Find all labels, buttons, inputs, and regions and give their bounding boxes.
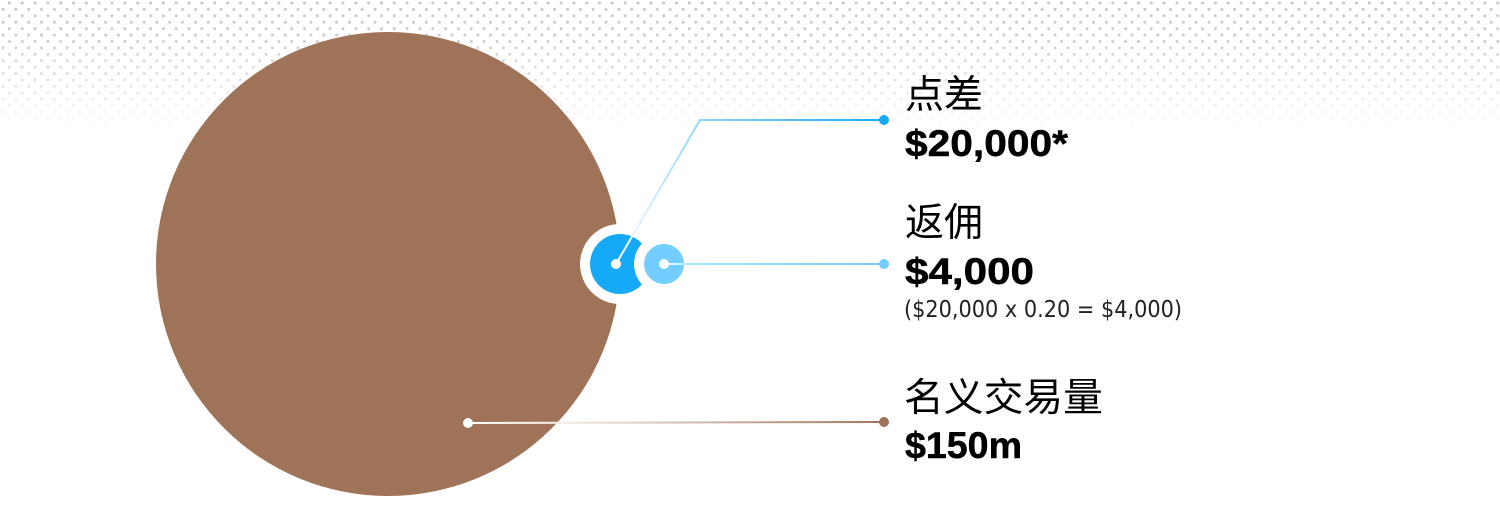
label: rebate: ($20,000 x 0.20 = $4,000)	[904, 297, 1182, 323]
label: spread	[905, 74, 1069, 164]
connector: notional volume	[463, 417, 889, 428]
circle: rebate	[644, 244, 684, 284]
label: spread: $20,000*	[905, 123, 1069, 164]
circle: notional volume	[156, 32, 620, 496]
label: rebate: 返佣	[905, 202, 983, 245]
label: notional volume: $150m	[905, 425, 1022, 466]
connector: rebate	[659, 259, 889, 269]
dotted background pattern	[2, 2, 1500, 118]
label: spread: 点差	[905, 74, 983, 117]
label: notional volume	[904, 377, 1103, 466]
circle: spread	[590, 234, 650, 294]
white ring behind rebate circle	[634, 234, 694, 294]
label: rebate	[904, 202, 1182, 323]
label: rebate: $4,000	[905, 251, 1034, 292]
chart: proportional circles	[156, 32, 694, 496]
label: notional volume: 名义交易量	[904, 377, 1103, 420]
connector: spread	[611, 115, 889, 269]
white ring behind spread circle	[580, 224, 660, 304]
